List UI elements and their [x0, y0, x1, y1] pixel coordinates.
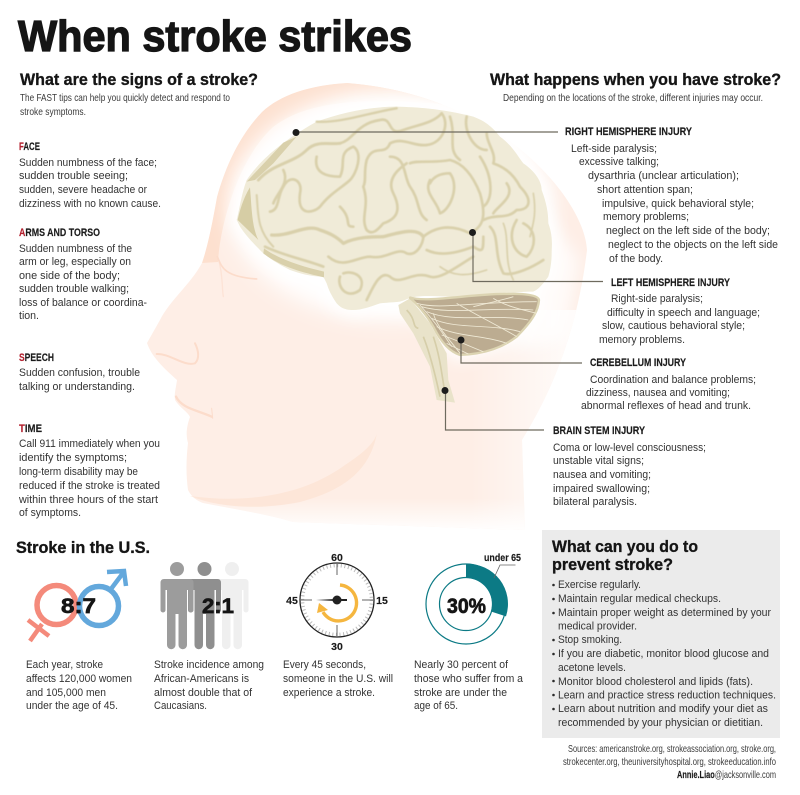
caption: stopwatch	[283, 659, 393, 699]
caption: gender: under the age of 45.	[26, 700, 118, 712]
face block: dizziness with no known cause.	[19, 198, 161, 210]
face block	[19, 141, 161, 210]
face block: sudden trouble seeing;	[19, 170, 128, 182]
arms and torso block: tion.	[19, 310, 39, 322]
icon: stopwatch: 30	[331, 641, 343, 653]
leader: right hemisphere	[292, 129, 558, 136]
caption: gender	[26, 659, 132, 712]
brain stem injury: Coma or low-level consciousness;	[553, 442, 706, 454]
chart: donut 30 percent: under 65	[484, 552, 521, 564]
caption: gender: and 105,000 men	[26, 687, 106, 699]
panel: prevention: medical provider.	[558, 620, 637, 632]
speech block: Sudden confusion, trouble	[19, 367, 140, 379]
cerebrum	[237, 107, 552, 310]
caption: stopwatch: someone in the U.S. will	[283, 673, 393, 685]
cerebellum injury	[581, 357, 756, 412]
cerebellum injury: dizziness, nausea and vomiting;	[586, 387, 730, 399]
arms and torso block	[19, 227, 147, 322]
heading: what happens: What happens when you have stroke?	[490, 70, 781, 89]
right hemisphere injury: neglect on the left side of the body;	[606, 225, 770, 237]
left hemisphere injury: Right-side paralysis;	[611, 293, 703, 305]
right hemisphere injury: short attention span;	[597, 184, 693, 196]
caption: people: almost double that of	[154, 687, 253, 699]
time block: reduced if the stroke is treated	[19, 480, 160, 492]
panel: prevention: Monitor blood cholesterol and lipids (fats).	[558, 676, 753, 688]
arms and torso block: loss of balance or coordina-	[19, 297, 147, 309]
time block: long-term disability may be	[19, 466, 138, 478]
chart: donut 30 percent: 30%	[447, 595, 486, 618]
face block: Sudden numbness of the face;	[19, 157, 157, 169]
caption: donut: age of 65.	[414, 700, 458, 712]
panel: prevention: What can you do to	[552, 537, 698, 556]
panel: prevention	[542, 530, 780, 738]
right hemisphere injury: impulsive, quick behavioral style;	[602, 198, 754, 210]
brain stem	[398, 298, 455, 403]
title: When stroke strikes	[18, 12, 412, 61]
icon: stopwatch: 60	[331, 552, 343, 564]
speech block: SPEECH	[19, 352, 54, 364]
caption: gender: affects 120,000 women	[26, 673, 132, 685]
facial lines	[157, 257, 257, 418]
brain folds	[257, 108, 543, 300]
brain	[237, 107, 552, 403]
right hemisphere injury: memory problems;	[603, 211, 689, 223]
panel: prevention: Learn about nutrition and modify your diet as	[558, 703, 768, 715]
left hemisphere injury: difficulty in speech and language;	[607, 307, 760, 319]
leader: left hemisphere	[469, 229, 603, 282]
brain stem injury: impaired swallowing;	[553, 483, 650, 495]
icon: stopwatch: 15	[376, 595, 388, 607]
panel: prevention: prevent stroke?	[552, 555, 673, 574]
time block: of symptoms.	[19, 507, 81, 519]
right hemisphere injury	[565, 126, 778, 265]
caption: donut: stroke are under the	[414, 687, 507, 699]
caption: donut: those who suffer from a	[414, 673, 524, 685]
left hemisphere injury	[599, 277, 760, 346]
caption: donut	[414, 659, 524, 712]
panel: prevention: Stop smoking.	[558, 634, 622, 646]
cerebellum	[409, 294, 539, 355]
caption: people	[154, 659, 264, 712]
panel: prevention: If you are diabetic, monitor blood glucose and	[558, 648, 769, 660]
intro text: The FAST tips can help you quickly detect and respond to	[20, 92, 230, 104]
heading: stroke in the US: Stroke in the U.S.	[16, 538, 150, 557]
chart: donut 30 percent	[426, 552, 521, 644]
caption: people: Caucasians.	[154, 700, 207, 712]
caption: people: Stroke incidence among	[154, 659, 264, 671]
time block: identify the symptoms;	[19, 452, 127, 464]
brain stem injury	[553, 425, 706, 508]
right hemisphere injury: neglect to the objects on the left side	[608, 239, 778, 251]
icon: stopwatch	[286, 552, 388, 653]
panel: prevention: Maintain proper weight as determined by your	[558, 607, 771, 619]
jaw shade	[190, 433, 377, 507]
brain stem injury: nausea and vomiting;	[553, 469, 651, 481]
icon: people ratio: 2:1	[202, 595, 234, 618]
face block: FACE	[19, 141, 40, 153]
speech block	[19, 352, 140, 393]
brain stem injury: BRAIN STEM INJURY	[553, 425, 646, 437]
left hemisphere injury: slow, cautious behavioral style;	[602, 320, 745, 332]
arms and torso block: arm or leg, especially on	[19, 256, 131, 268]
panel: prevention: acetone levels.	[558, 662, 626, 674]
caption: donut: Nearly 30 percent of	[414, 659, 509, 671]
right hemisphere injury: excessive talking;	[579, 156, 659, 168]
icon: stopwatch: 45	[286, 595, 298, 607]
panel: prevention: Learn and practice stress reduction techniques.	[558, 690, 776, 702]
brain stem injury: unstable vital signs;	[553, 455, 644, 467]
arms and torso block: ARMS AND TORSO	[19, 227, 100, 239]
arms and torso block: Sudden numbness of the	[19, 243, 132, 255]
intro text	[20, 92, 230, 118]
right hemisphere injury: Left-side paralysis;	[571, 143, 657, 155]
caption: stopwatch: experience a stroke.	[283, 687, 375, 699]
time block: TIME	[19, 423, 42, 435]
cerebellum injury: CEREBELLUM INJURY	[590, 357, 687, 369]
caption: stopwatch: Every 45 seconds,	[283, 659, 366, 671]
intro text: stroke symptoms.	[20, 106, 86, 118]
time block: within three hours of the start	[18, 494, 158, 506]
right hemisphere injury: of the body.	[609, 253, 663, 265]
caption: people: African-Americans is	[154, 673, 249, 685]
arms and torso block: one side of the body;	[19, 270, 120, 282]
leader: brain stem	[442, 387, 544, 430]
leader: cerebellum	[458, 336, 582, 363]
cerebellum injury: abnormal reflexes of head and trunk.	[581, 400, 751, 412]
panel: prevention: Maintain regular medical checkups.	[558, 593, 721, 605]
caption: gender: Each year, stroke	[26, 659, 103, 671]
panel: prevention: recommended by your physician or dietitian.	[558, 717, 763, 729]
left hemisphere injury: memory problems.	[599, 334, 685, 346]
sources	[563, 743, 776, 781]
time block: Call 911 immediately when you	[19, 438, 160, 450]
head silhouette	[140, 75, 600, 535]
left hemisphere injury: LEFT HEMISPHERE INJURY	[611, 277, 731, 289]
right hemisphere injury: RIGHT HEMISPHERE INJURY	[565, 126, 693, 138]
heading: signs of a stroke: What are the signs of a stroke?	[20, 70, 258, 89]
face block: sudden, severe headache or	[19, 184, 147, 196]
cerebellum injury: Coordination and balance problems;	[590, 374, 756, 386]
time block	[18, 423, 160, 519]
right hemisphere injury: dysarthria (unclear articulation);	[588, 170, 739, 182]
brain stem injury: bilateral paralysis.	[553, 496, 637, 508]
arms and torso block: sudden trouble walking;	[19, 283, 129, 295]
icon: gender ratio: 8:7	[61, 595, 96, 618]
sources: Annie.Liao@jacksonville.com	[677, 769, 776, 781]
panel: prevention: Exercise regularly.	[558, 579, 641, 591]
speech block: talking or understanding.	[19, 381, 135, 393]
icon: gender ratio	[28, 571, 126, 641]
icon: people ratio	[160, 562, 248, 649]
